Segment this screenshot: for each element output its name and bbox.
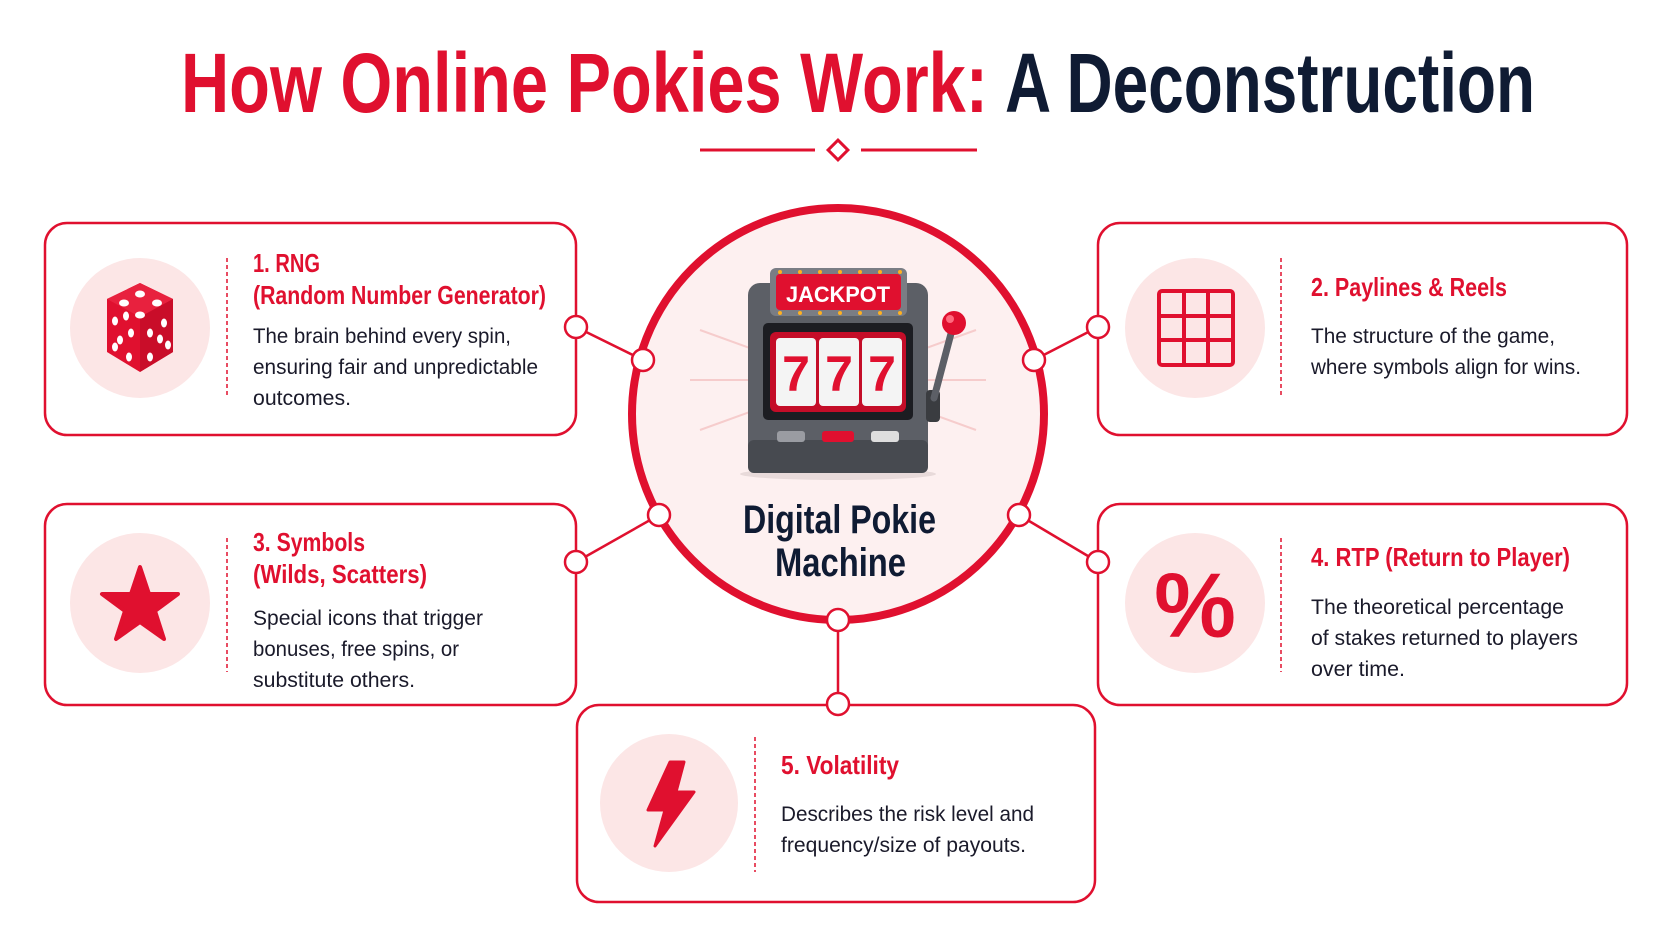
hub label: Digital Pokie — [743, 498, 936, 542]
body: RTP: over time. — [1311, 658, 1405, 681]
title divider — [700, 140, 977, 160]
heading: RNG: 1. RNG — [253, 248, 320, 278]
heading: Volatility: 5. Volatility — [781, 750, 899, 780]
body: Symbols: substitute others. — [253, 669, 415, 692]
icon: slot machine: JACKPOT — [786, 282, 891, 307]
heading: Symbols: (Wilds, Scatters) — [253, 559, 427, 589]
heading: RTP: 4. RTP (Return to Player) — [1311, 542, 1570, 572]
heading: Symbols: 3. Symbols — [253, 527, 365, 557]
body: Symbols: Special icons that trigger — [253, 607, 483, 630]
icon: slot machine — [690, 268, 986, 480]
body: Volatility: frequency/size of payouts. — [781, 834, 1026, 857]
icon: lightning — [600, 734, 738, 872]
body: Paylines: where symbols align for wins. — [1310, 356, 1581, 379]
body: Symbols — [253, 607, 483, 692]
icon: dice — [70, 258, 210, 398]
body: RNG — [253, 325, 538, 410]
body: RNG: ensuring fair and unpredictable — [253, 356, 538, 379]
icon: slot machine: 7 — [868, 346, 896, 402]
icon: slot machine: 7 — [782, 346, 810, 402]
icon: grid — [1125, 258, 1265, 398]
body: Paylines — [1310, 325, 1581, 379]
connector nodes — [565, 316, 1109, 715]
body: RNG: The brain behind every spin, — [253, 325, 511, 348]
icon: percent: % — [1154, 555, 1236, 657]
body: Paylines: The structure of the game, — [1311, 325, 1555, 348]
central hub: digital pokie machine — [632, 208, 1044, 620]
card 4: RTP — [1098, 504, 1627, 705]
body: RTP: The theoretical percentage — [1311, 596, 1564, 619]
heading: Paylines: 2. Paylines & Reels — [1311, 272, 1507, 302]
card 5: Volatility — [577, 705, 1095, 902]
card 1: RNG — [45, 223, 576, 435]
heading: Symbols — [253, 527, 427, 589]
connectors — [576, 327, 1098, 704]
hub label: Machine — [775, 541, 906, 585]
body: Volatility: Describes the risk level and — [781, 803, 1034, 826]
body: Volatility — [781, 803, 1034, 857]
icon: star — [70, 533, 210, 673]
body: RNG: outcomes. — [253, 387, 351, 410]
body: RTP — [1311, 596, 1578, 681]
hub label — [743, 498, 936, 585]
card 2: Paylines — [1098, 223, 1627, 435]
title: How Online Pokies Work: — [181, 36, 988, 130]
body: RTP: of stakes returned to players — [1311, 627, 1578, 650]
icon: slot machine: 7 — [825, 346, 853, 402]
icon: percent — [1125, 533, 1265, 673]
card 3: Symbols — [45, 504, 576, 705]
heading: RNG — [253, 248, 546, 310]
body: Symbols: bonuses, free spins, or — [253, 638, 459, 661]
heading: RNG: (Random Number Generator) — [253, 280, 546, 310]
